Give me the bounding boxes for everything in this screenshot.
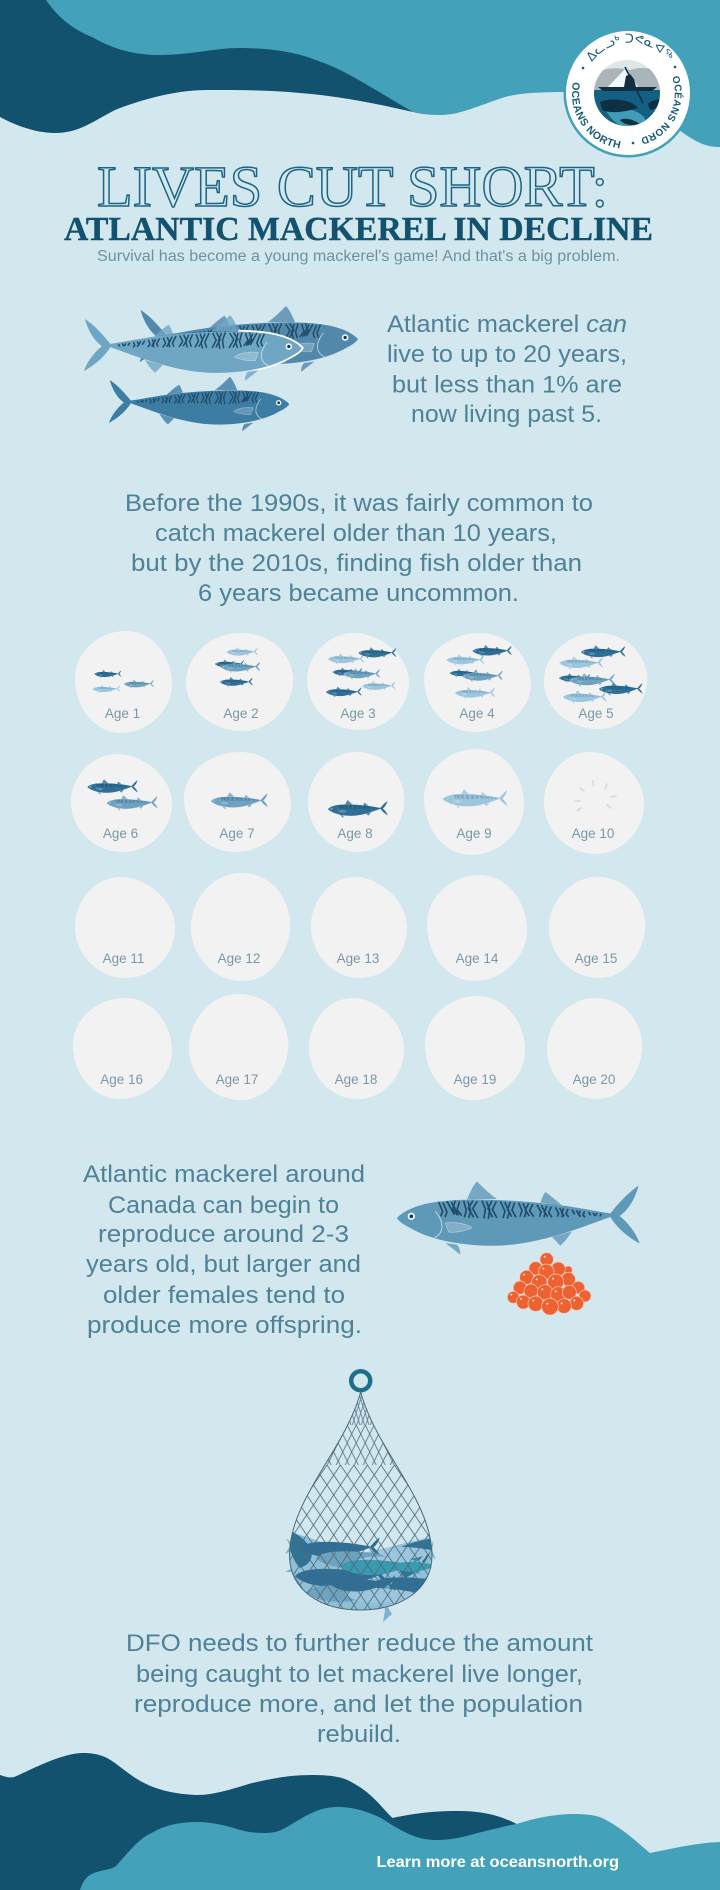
logo ring text: OCEANS NORTH	[572, 82, 621, 148]
age 7	[184, 752, 291, 852]
age 10	[544, 752, 644, 854]
age 13: Age 13	[337, 951, 379, 966]
age 6: Age 6	[103, 826, 138, 841]
text: call to action	[126, 1630, 593, 1748]
catch in net	[285, 1532, 436, 1622]
age 19	[425, 996, 525, 1100]
age 20	[547, 998, 642, 1099]
age 8	[308, 752, 404, 852]
net ring	[351, 1371, 370, 1390]
age 9	[424, 749, 524, 855]
logo: Oceans North	[564, 31, 690, 158]
text: catch history: catch mackerel older than 10 years,	[155, 520, 557, 547]
text: catch history: but by the 2010s, finding fish older than	[131, 550, 582, 577]
net mesh	[285, 1392, 435, 1612]
age 17: Age 17	[216, 1072, 258, 1087]
bottom waves	[0, 1753, 720, 1890]
age 15	[549, 877, 645, 978]
age 8: Age 8	[337, 826, 373, 841]
age 7: Age 7	[219, 826, 255, 841]
age 6	[71, 754, 172, 852]
age 3	[307, 633, 409, 730]
age 2: Age 2	[223, 706, 259, 721]
fish group illustration	[84, 306, 358, 431]
age 17	[189, 994, 288, 1100]
top waves	[0, 0, 720, 147]
age 13	[311, 877, 407, 978]
age 11: Age 11	[103, 951, 144, 966]
age 16	[73, 998, 172, 1099]
icon: roe pile	[507, 1253, 591, 1315]
text: call to action: being caught to let mackerel live longer,	[136, 1661, 583, 1688]
title line 2: ATLANTIC MACKEREL IN DECLINE	[64, 211, 653, 248]
logo ring text	[572, 34, 684, 148]
text: lifespan: live to up to 20 years,	[387, 341, 627, 368]
text: lifespan: Atlantic mackerel can	[387, 311, 627, 338]
age 9: Age 9	[456, 826, 492, 841]
subtitle: Survival has become a young mackerel's game! And that's a big problem.	[97, 248, 620, 265]
panel: age circles	[71, 631, 647, 1100]
age 5: Age 5	[578, 706, 614, 721]
text: reproduction: older females tend to	[103, 1282, 345, 1309]
age 12: Age 12	[218, 951, 260, 966]
radial dashes	[575, 781, 616, 811]
age 10: Age 10	[572, 826, 614, 841]
text: reproduction: reproduce around 2-3	[98, 1221, 349, 1248]
text: call to action: rebuild.	[317, 1721, 401, 1748]
logo ring text: ᐃᓚᓗᒃ ᑐᕙᓇᐊᖅ	[587, 34, 672, 62]
text: reproduction: Canada can begin to	[108, 1192, 339, 1219]
text: reproduction: years old, but larger and	[86, 1251, 361, 1278]
age 14	[427, 875, 527, 981]
text: call to action: reproduce more, and let the population	[134, 1691, 583, 1718]
text: catch history: Before the 1990s, it was fairly common to	[125, 490, 593, 517]
age 4	[424, 633, 531, 732]
age 12	[191, 873, 290, 981]
text: catch history	[125, 490, 593, 607]
title	[64, 154, 653, 265]
age 15: Age 15	[575, 951, 617, 966]
age 3: Age 3	[340, 706, 376, 721]
logo ring text: OCÉANS NORD	[642, 76, 684, 144]
logo emblem	[594, 60, 660, 126]
age 11	[75, 877, 175, 978]
text: lifespan	[387, 311, 627, 428]
age 18: Age 18	[335, 1072, 377, 1087]
age 1	[75, 631, 172, 733]
age 5	[544, 633, 647, 729]
age 1: Age 1	[105, 706, 140, 721]
text: catch history: 6 years became uncommon.	[198, 580, 519, 607]
age 2	[186, 633, 293, 731]
text: reproduction: Atlantic mackerel around	[83, 1161, 365, 1188]
age 14: Age 14	[456, 951, 499, 966]
age 16: Age 16	[100, 1072, 143, 1087]
title line 1: LIVES CUT SHORT:	[97, 154, 608, 219]
text: lifespan: but less than 1% are	[392, 372, 622, 398]
footer link text: Learn more at oceansnorth.org	[376, 1854, 619, 1871]
icon: fishing net with catch	[285, 1369, 436, 1622]
text: call to action: DFO needs to further reduce the amount	[126, 1630, 593, 1657]
age 4: Age 4	[459, 706, 495, 721]
text: lifespan: now living past 5.	[411, 401, 602, 428]
age 18	[309, 998, 404, 1099]
age 20: Age 20	[573, 1072, 615, 1087]
text: reproduction: produce more offspring.	[87, 1312, 362, 1339]
age 19: Age 19	[454, 1072, 496, 1087]
text: reproduction	[83, 1161, 365, 1339]
net outline	[289, 1392, 432, 1610]
icon: large mackerel	[397, 1181, 640, 1255]
